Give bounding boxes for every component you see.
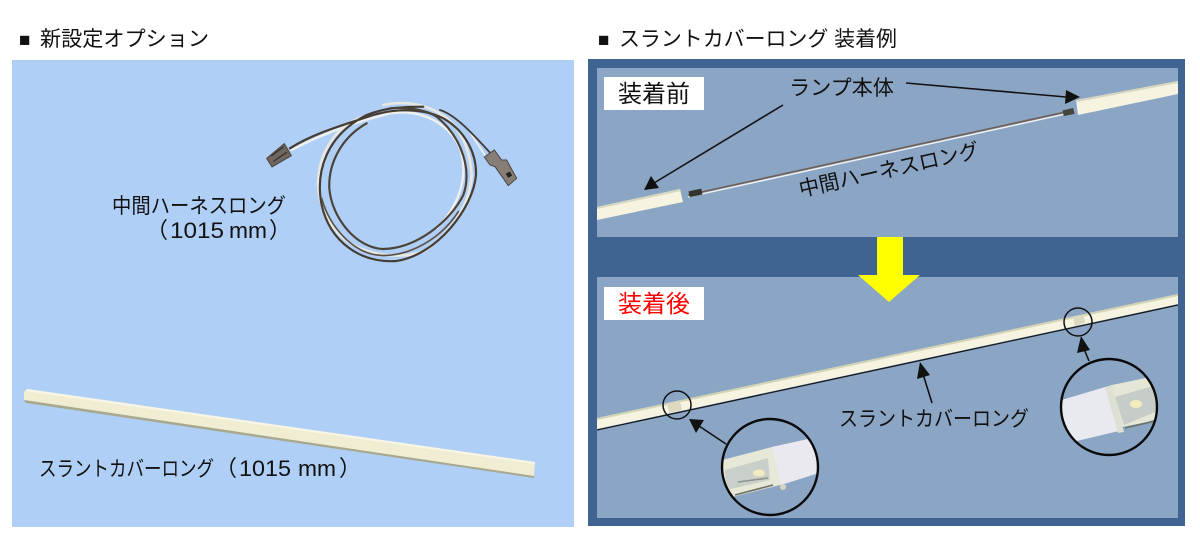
arrow: to left lamp [644, 105, 783, 190]
magnified view right [1055, 359, 1160, 455]
label: slant cover long: ） [339, 456, 361, 481]
label: harness length: mm [229, 218, 267, 243]
label: before mounting [604, 77, 704, 110]
cover bar photo [24, 389, 535, 478]
label: harness long: 中間ハーネスロング [112, 195, 286, 218]
label: slant cover long: スラントカバーロング [39, 458, 214, 481]
label: slant cover long: mm [298, 456, 336, 481]
panel: after mounting [597, 277, 1178, 518]
label: after mounting [604, 287, 704, 320]
harness photo [267, 103, 517, 261]
heading: new option: 新設定オプション [40, 28, 209, 51]
mounted cover bar [597, 294, 1178, 430]
magnified view left [715, 419, 822, 515]
heading: mounting example: スラントカバーロング 装着例 [619, 28, 897, 51]
label: lamp body: ランプ本体 [789, 77, 894, 100]
small circle right [1064, 308, 1092, 336]
panel: mounting example [588, 59, 1185, 526]
heading: mounting example: ■ [598, 30, 609, 51]
label: slant cover long: 1015 [239, 456, 291, 481]
panel: before mounting [597, 68, 1178, 237]
arrow: right magnifier [1077, 336, 1090, 361]
arrow: to right lamp [906, 83, 1080, 104]
label: after mounting: 装着後 [618, 291, 690, 318]
arrow: yellow down [858, 237, 920, 302]
arrow: to cover [917, 362, 932, 403]
lamp and harness photo [597, 81, 1178, 220]
label: rotated harness: 中間ハーネスロング [797, 139, 981, 202]
left connector [267, 144, 291, 167]
label: slant cover long: （ [215, 456, 237, 481]
label: before mounting: 装着前 [618, 81, 690, 108]
right connector [484, 150, 517, 186]
label: harness length: （ [146, 218, 168, 243]
label: slant cover long: スラントカバーロング [839, 408, 1029, 431]
arrow: left magnifier [689, 419, 726, 444]
panel: new options [12, 60, 574, 527]
small circle left [663, 391, 691, 419]
label: harness length: ） [269, 218, 291, 243]
label: harness length: 1015 [170, 218, 224, 243]
heading: new option: ■ [19, 30, 30, 51]
